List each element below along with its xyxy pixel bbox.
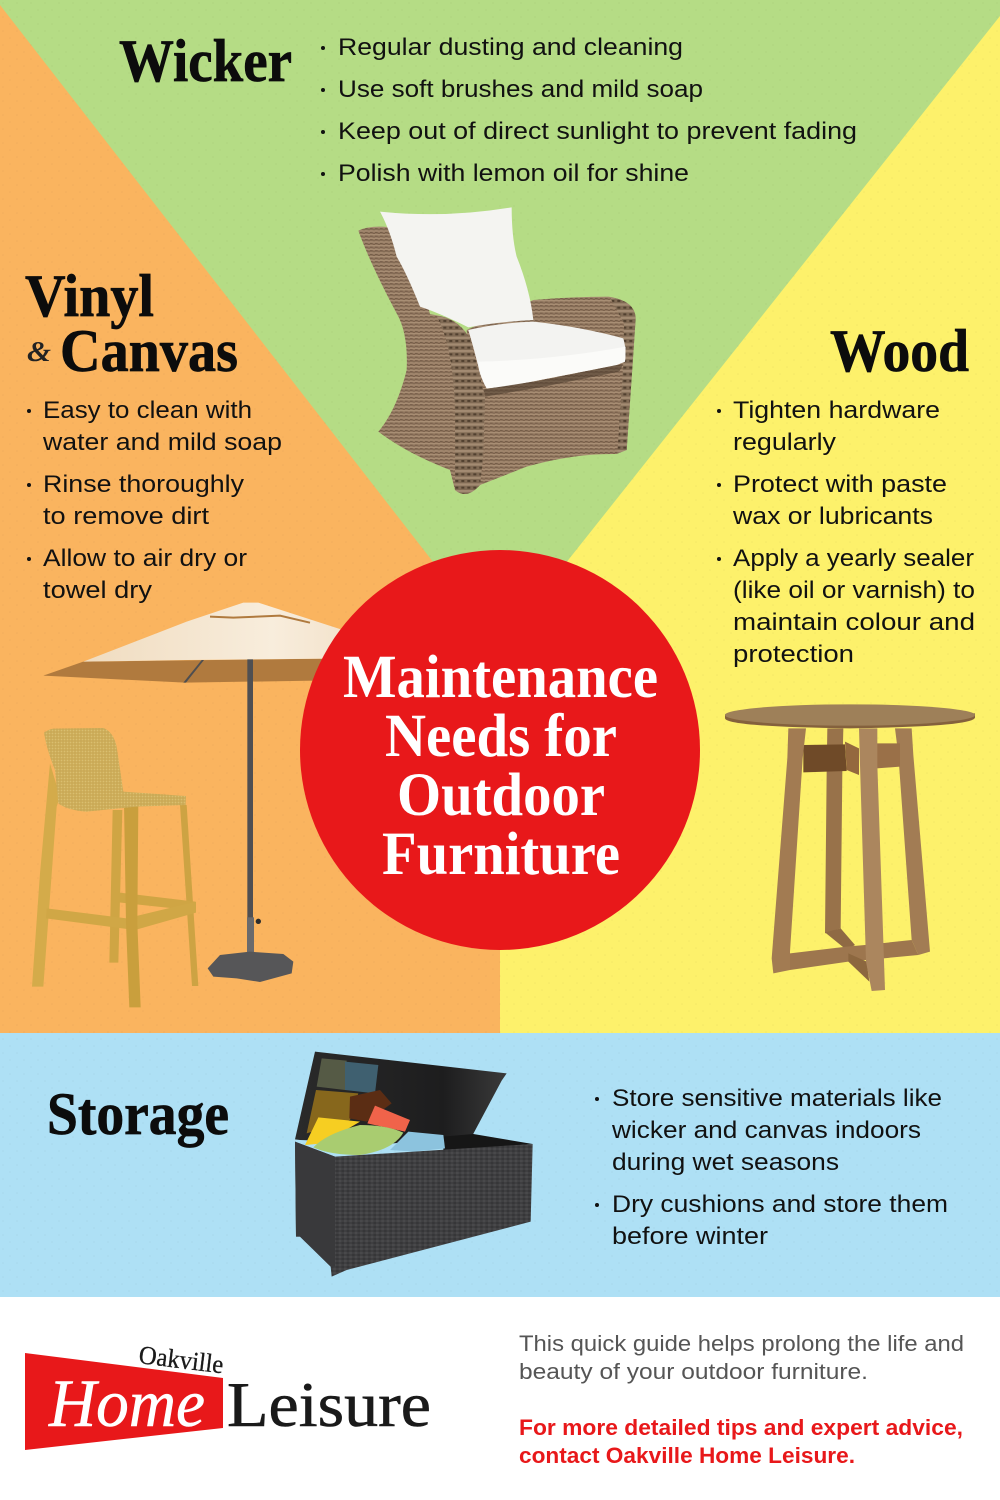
text block: footer summary: This quick guide helps prolong the life and	[519, 1331, 964, 1356]
text block: vinyl and canvas care list: Allow to air dry or	[43, 545, 247, 572]
heading: Vinyl & Canvas: Vinyl	[25, 263, 154, 329]
text block: vinyl and canvas care list: to remove dirt	[43, 503, 209, 530]
title: Maintenance	[343, 644, 658, 711]
text block: vinyl and canvas care list: water and mild soap	[42, 429, 282, 456]
text block: wicker care list: Keep out of direct sunlight to prevent fading	[338, 118, 857, 145]
text block: vinyl and canvas care list: Rinse thoroughly	[43, 471, 245, 498]
text block: wood care list: maintain colour and	[733, 609, 975, 636]
heading: Vinyl & Canvas	[25, 263, 238, 384]
heading: Storage: Storage	[47, 1081, 229, 1147]
title: Furniture	[382, 821, 620, 888]
logo: Oakville Home Leisure: Oakville	[137, 1340, 225, 1379]
heading: Vinyl & Canvas: Canvas	[60, 318, 238, 384]
heading: Wood: Wood	[830, 318, 969, 384]
logo: Oakville Home Leisure	[25, 1340, 431, 1450]
icon: wicker armchair	[358, 207, 636, 494]
chart: central red circle	[300, 550, 700, 950]
panel: storage background	[0, 1033, 1000, 1297]
text block: footer summary	[519, 1331, 964, 1384]
heading: Vinyl & Canvas: &	[27, 336, 51, 368]
text block: storage tips	[595, 1085, 948, 1250]
text block: wicker care list: Use soft brushes and mild soap	[338, 76, 703, 103]
icon: wooden round table	[725, 704, 975, 991]
icon: yellow bar stool	[32, 728, 198, 1007]
text block: storage tips: during wet seasons	[612, 1149, 839, 1176]
title	[343, 644, 658, 888]
logo: Oakville Home Leisure: Leisure	[227, 1369, 431, 1440]
panel: wood background	[500, 16, 1000, 1033]
text block: wood care list: protection	[733, 641, 854, 668]
heading: Wicker: Wicker	[119, 28, 292, 94]
callout: contact: For more detailed tips and expert advice,	[519, 1415, 963, 1440]
text block: storage tips: Store sensitive materials like	[612, 1085, 942, 1112]
text block: vinyl and canvas care list: Easy to clean with	[43, 397, 252, 424]
text block: wood care list: regularly	[733, 429, 837, 456]
title: Outdoor	[397, 762, 605, 829]
text block: storage tips: wicker and canvas indoors	[611, 1117, 921, 1144]
text block: wicker care list	[321, 34, 857, 187]
text block: wood care list: (like oil or varnish) to	[733, 577, 975, 604]
icon: wicker storage box	[295, 1052, 533, 1277]
text block: wood care list: Tighten hardware	[733, 397, 940, 424]
text block: storage tips: Dry cushions and store them	[612, 1191, 948, 1218]
text block: wood care list: wax or lubricants	[732, 503, 933, 530]
logo: Oakville Home Leisure: Home	[48, 1365, 205, 1441]
text block: wood care list	[717, 397, 975, 668]
text block: wood care list: Protect with paste	[733, 471, 947, 498]
text block: vinyl and canvas care list: towel dry	[43, 577, 153, 604]
panel: wicker background	[0, 0, 1000, 1033]
text block: wood care list: Apply a yearly sealer	[733, 545, 974, 572]
panel: vinyl and canvas background	[0, 5, 500, 1033]
text block: storage tips: before winter	[612, 1223, 768, 1250]
callout: contact	[519, 1415, 963, 1468]
title: Needs for	[385, 703, 617, 770]
text block: vinyl and canvas care list	[27, 397, 282, 604]
callout: contact: contact Oakville Home Leisure.	[519, 1443, 855, 1468]
text block: wicker care list: Regular dusting and cleaning	[338, 34, 683, 61]
text block: wicker care list: Polish with lemon oil for shine	[338, 160, 689, 187]
panel: footer background	[0, 1297, 1000, 1500]
icon: patio umbrella	[43, 603, 353, 982]
text block: footer summary: beauty of your outdoor furniture.	[519, 1359, 868, 1384]
